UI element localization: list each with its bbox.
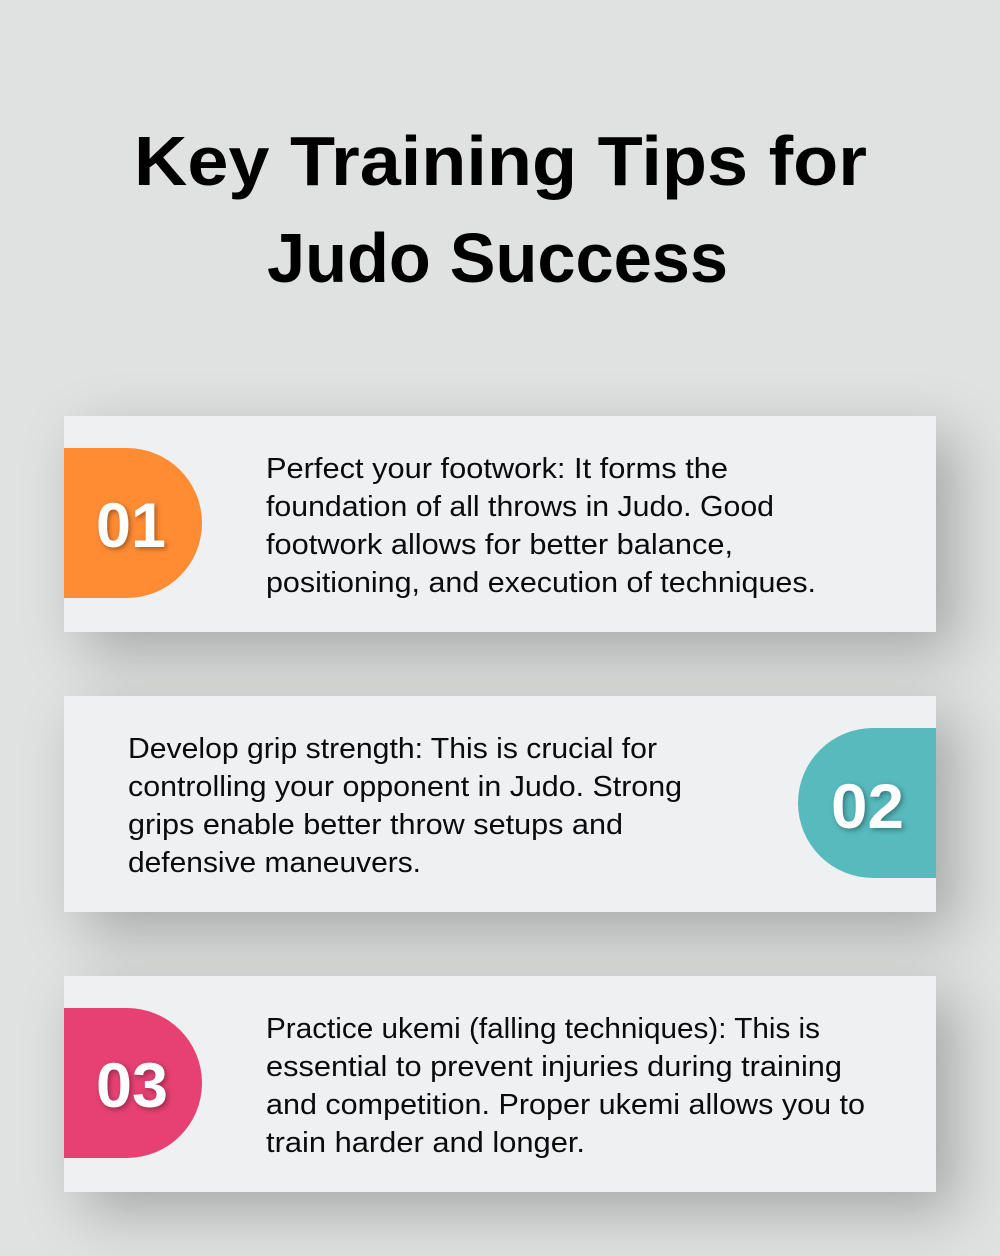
- tip 02 content: Develop grip strength: This is crucial for: [128, 733, 657, 765]
- tip 03 content: Practice ukemi (falling techniques): This is: [266, 1013, 820, 1045]
- tip 02 content: 02: [831, 772, 904, 842]
- tip 02 content: [128, 733, 906, 879]
- panel: tip 03 ukemi: [64, 976, 936, 1192]
- tip 03 content: [96, 1013, 865, 1159]
- tip 03 content: 03: [96, 1051, 168, 1121]
- panel: tip 01 footwork: [64, 416, 936, 632]
- number badge: 02: [798, 728, 936, 878]
- tip 01 content: [96, 453, 816, 599]
- tip 03 content: essential to prevent injuries during training: [266, 1051, 842, 1083]
- number badge: 01: [64, 448, 202, 598]
- tip 03 content: train harder and longer.: [266, 1127, 585, 1159]
- title: [134, 122, 867, 297]
- tip 01 content: footwork allows for better balance,: [266, 529, 733, 561]
- tip 01 content: Perfect your footwork: It forms the: [266, 453, 728, 485]
- panel: tip 02 grip strength: [64, 696, 936, 912]
- number badge: 03: [64, 1008, 202, 1158]
- tip 01 content: foundation of all throws in Judo. Good: [266, 491, 774, 523]
- tip 02 content: controlling your opponent in Judo. Strong: [128, 771, 682, 803]
- tip 02 content: defensive maneuvers.: [128, 847, 421, 879]
- title: Key Training Tips for: [134, 122, 867, 200]
- tip 01 content: positioning, and execution of techniques.: [266, 567, 816, 599]
- tip 03 content: and competition. Proper ukemi allows you to: [266, 1089, 865, 1121]
- tip 02 content: grips enable better throw setups and: [128, 809, 623, 841]
- title: Judo Success: [267, 219, 728, 297]
- tip 01 content: 01: [96, 491, 166, 561]
